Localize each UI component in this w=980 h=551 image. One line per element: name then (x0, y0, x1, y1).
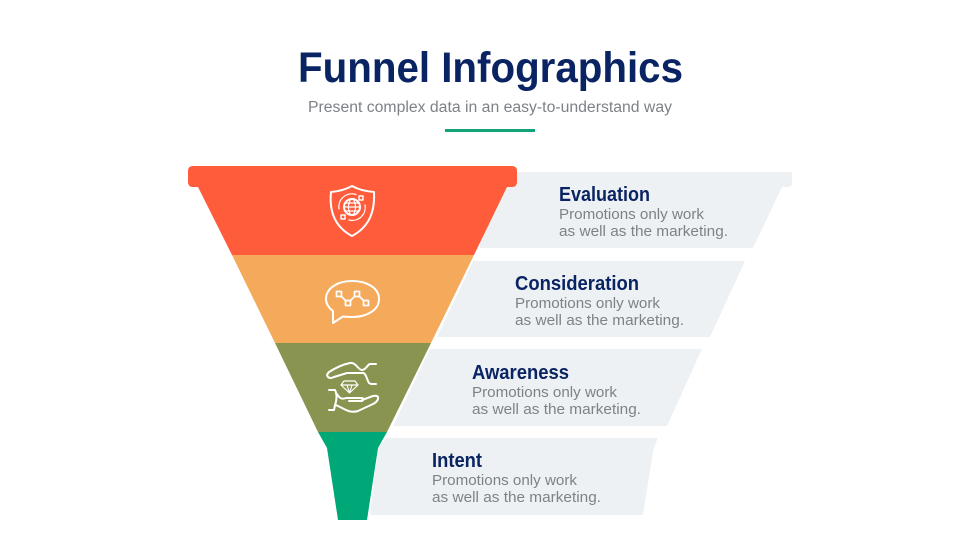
awareness heading: Awareness (472, 362, 569, 384)
intent heading: Intent (432, 450, 482, 472)
panel: consideration (437, 261, 745, 337)
icon: speech bubble with chart (326, 281, 379, 323)
evaluation text: Promotions only work (559, 206, 705, 223)
awareness text (472, 384, 641, 418)
icon: shield with globe (331, 186, 374, 236)
funnel segment: orange (232, 255, 474, 343)
consideration text (515, 295, 684, 329)
awareness text: Promotions only work (472, 384, 618, 401)
evaluation text (559, 206, 728, 240)
consideration heading: Consideration (515, 273, 639, 295)
intent text: Promotions only work (432, 472, 578, 489)
panel: evaluation (480, 172, 792, 248)
evaluation text: as well as the marketing. (559, 223, 728, 240)
consideration text: as well as the marketing. (515, 312, 684, 329)
funnel segment: red rim and top (188, 166, 517, 255)
funnel segment: olive (275, 343, 431, 432)
intent text: as well as the marketing. (432, 489, 601, 506)
subtitle: Present complex data in an easy-to-understand way (308, 99, 672, 116)
consideration text: Promotions only work (515, 295, 661, 312)
panel: awareness (393, 349, 702, 426)
accent rule (445, 129, 535, 132)
awareness text: as well as the marketing. (472, 401, 641, 418)
icon: hands with diamond (327, 363, 378, 412)
funnel (188, 166, 517, 520)
intent text (432, 472, 601, 506)
panel: intent (370, 438, 657, 515)
evaluation heading: Evaluation (559, 184, 650, 206)
funnel segment: green spout (318, 432, 387, 520)
title: Funnel Infographics (298, 44, 683, 92)
